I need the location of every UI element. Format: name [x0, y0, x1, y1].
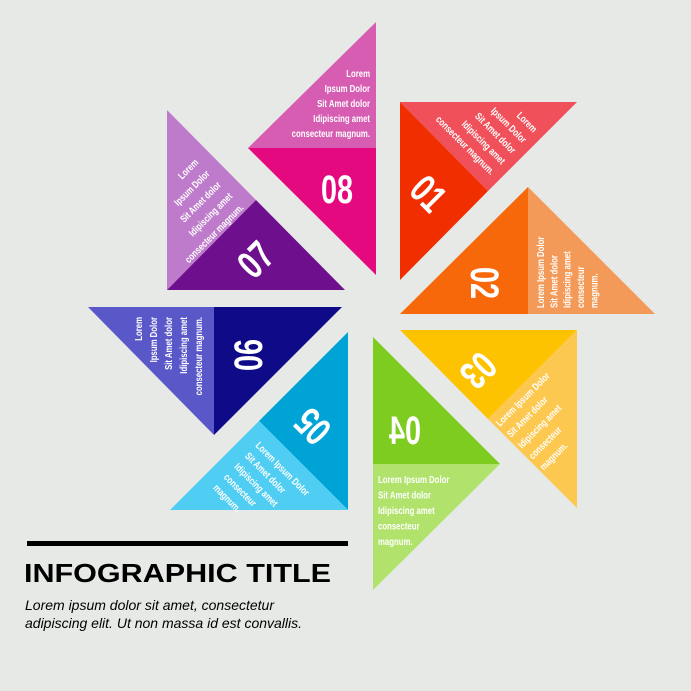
text: 04: Sit Amet dolor — [378, 490, 431, 501]
text: 02: consecteur — [575, 266, 586, 308]
text: 06: Ipsum Dolor — [148, 317, 159, 362]
number 05: 05 — [286, 399, 340, 453]
text: 08: Sit Amet dolor — [317, 98, 370, 109]
panel: 03 — [400, 330, 596, 508]
text: 03: Lorem Ipsum Dolor — [494, 370, 552, 429]
text: 04: magnum. — [378, 536, 413, 547]
text: 06: Lorem — [133, 317, 144, 341]
text: 03: magnum. — [538, 440, 570, 472]
number 06: 06 — [227, 339, 271, 371]
number 01: 01 — [401, 167, 455, 221]
text: 06: Idipiscing amet — [178, 317, 189, 374]
text: 08: consecteur magnum. — [292, 128, 370, 139]
text: 06: Sit Amet dolor — [163, 317, 174, 370]
text: 05: Lorem Ipsum Dolor — [253, 440, 312, 498]
text: 01: consecteur magnum. — [434, 114, 497, 177]
text: 02: magnum. — [588, 273, 600, 308]
subtitle: Lorem ipsum dolor sit amet, consectetur — [25, 597, 275, 613]
text: 04: Idipiscing amet — [378, 505, 435, 516]
text: 07: Idipiscing amet — [187, 191, 235, 239]
text: 02: Lorem Ipsum Dolor — [535, 236, 546, 308]
panel: 01 — [400, 71, 577, 280]
panel: 07 — [137, 110, 345, 290]
text: 08: Lorem — [346, 68, 370, 79]
text: 07: Lorem — [176, 157, 201, 181]
panel: 04 — [373, 337, 500, 590]
text: 01: Sit Amet dolor — [473, 110, 518, 156]
text: 08: Idipiscing amet — [313, 113, 370, 124]
number 03: 03 — [451, 343, 505, 397]
text: 07: consecteur magnum. — [183, 202, 246, 265]
number 07: 07 — [229, 233, 283, 287]
text: 07: Sit Amet dolor — [178, 179, 224, 225]
panel: 05 — [170, 332, 348, 541]
text: 05: consecteur — [222, 472, 259, 509]
text: 05: magnum. — [211, 482, 243, 514]
text: 08: Ipsum Dolor — [325, 83, 370, 94]
text: 05: Sit Amet dolor — [243, 450, 288, 496]
text: 04: Lorem Ipsum Dolor — [378, 474, 450, 485]
text: 03: consecteur — [527, 424, 564, 461]
number 04: 04 — [388, 409, 421, 453]
number 08: 08 — [321, 168, 353, 212]
text: 01: Idipiscing amet — [460, 118, 507, 166]
panel: 06 — [88, 307, 342, 435]
panel: 02 — [400, 187, 655, 314]
subtitle: adipiscing elit. Ut non massa id est convallis. — [25, 615, 302, 631]
text: 02: Sit Amet dolor — [548, 255, 560, 308]
text: 03: Idipiscing amet — [516, 403, 564, 450]
text: 06: consecteur magnum. — [193, 317, 204, 395]
text: 01: Ipsum Dolor — [489, 105, 529, 145]
text: 05: Idipiscing amet — [232, 461, 280, 509]
text: 03: Sit Amet dolor — [505, 394, 550, 440]
text: 02: Idipiscing amet — [562, 251, 573, 308]
number 02: 02 — [462, 267, 506, 299]
text: 07: Ipsum Dolor — [172, 168, 212, 208]
title: INFOGRAPHIC TITLE — [24, 558, 331, 588]
text: 01: Lorem — [515, 110, 539, 135]
title block — [24, 541, 348, 631]
text: 04: consecteur — [378, 521, 420, 532]
panel: 08 — [248, 22, 376, 275]
